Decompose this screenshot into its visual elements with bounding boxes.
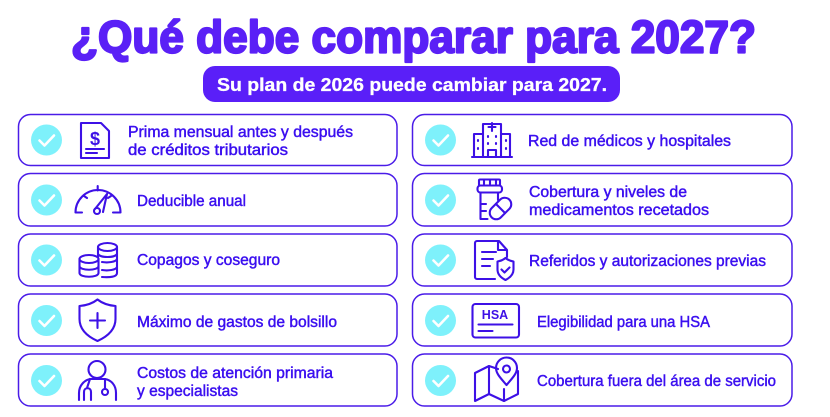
label: Deducible anual [137,193,246,210]
panel: copagos [18,234,397,286]
label [137,365,333,400]
icon: hsa card [472,304,519,338]
icon: gauge [76,186,120,214]
icon: hospital [472,123,512,157]
label: Prima mensual antes y después [128,124,353,141]
panel: red de medicos [412,114,792,166]
label: medicamentos recetados [529,202,709,219]
label: y especialistas [137,383,238,400]
icon: check [425,365,456,396]
label: de créditos tributarios [128,142,288,159]
icon: check [31,244,62,276]
icon: invoice with dollar: $ [90,129,100,149]
panel: fuera del area [412,354,792,406]
panel: hsa [412,294,792,346]
icon: document shield [475,241,514,280]
panel: prima mensual [18,114,397,166]
label: Cobertura fuera del área de servicio [537,373,776,390]
label: Referidos y autorizaciones previas [529,253,766,270]
icon: check [31,365,62,396]
panel: referidos [412,234,792,286]
panel: deducible [18,174,397,226]
icon: check [425,124,456,156]
subtitle pill [203,66,620,102]
panel: medicamentos [412,174,792,226]
label: Elegibilidad para una HSA [537,314,711,331]
icon: hsa card: HSA [482,308,508,322]
subtitle pill: Su plan de 2026 puede cambiar para 2027. [217,74,607,95]
title: ¿Qué debe comparar para 2027? [71,12,756,62]
panel: costos [18,354,397,406]
icon: pill bottle [478,180,514,222]
label: Copagos y coseguro [137,252,280,269]
icon: check [425,184,456,216]
label [128,124,353,159]
icon: check [425,244,456,276]
label: Costos de atención primaria [137,365,333,382]
panel: maximo [18,294,397,346]
label: Red de médicos y hospitales [528,133,731,150]
icon: shield plus [80,300,116,341]
label: Máximo de gastos de bolsillo [137,314,337,331]
label: Cobertura y niveles de [529,184,687,201]
icon: invoice with dollar [81,123,109,158]
icon: coins [80,243,117,277]
icon: map pin [475,358,518,401]
label [529,184,709,219]
icon: check [425,305,456,336]
icon: check [31,124,62,156]
icon: check [31,305,62,336]
icon: check [31,184,62,216]
icon: doctor [79,361,116,400]
